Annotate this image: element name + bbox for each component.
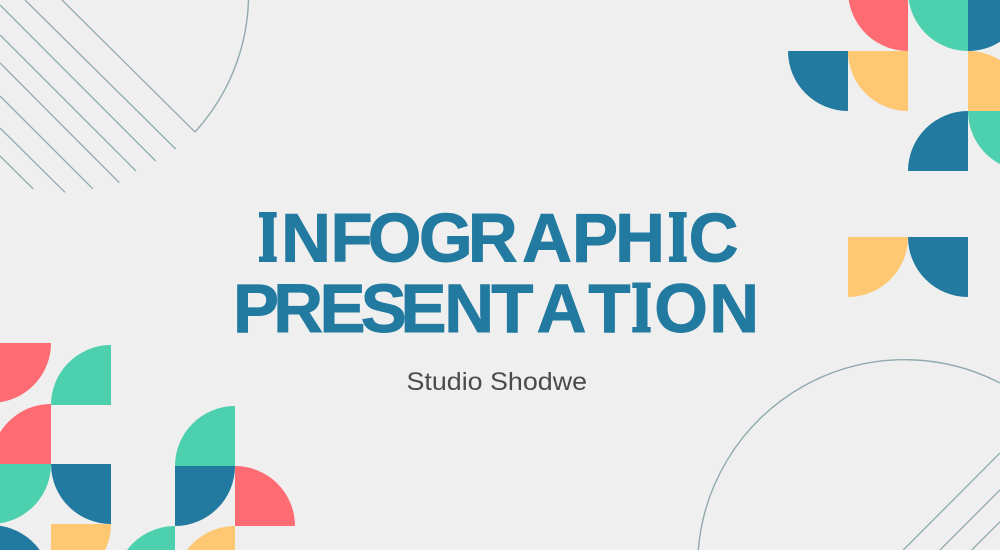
geometric cluster: bottom centre-left [127,406,295,550]
geometric cluster: bottom left [0,343,111,550]
subtitle: Studio Shodwe [406,368,587,396]
geometric pair: right middle [848,237,968,297]
title [233,200,759,347]
geometric cluster: top right [788,0,1000,171]
line art: top-left arc and diagonals [0,0,248,192]
line art: bottom-right arc and diagonals [698,360,1000,550]
title: PRESENTATION [233,270,759,347]
title: INFOGRAPHIC [259,200,738,277]
